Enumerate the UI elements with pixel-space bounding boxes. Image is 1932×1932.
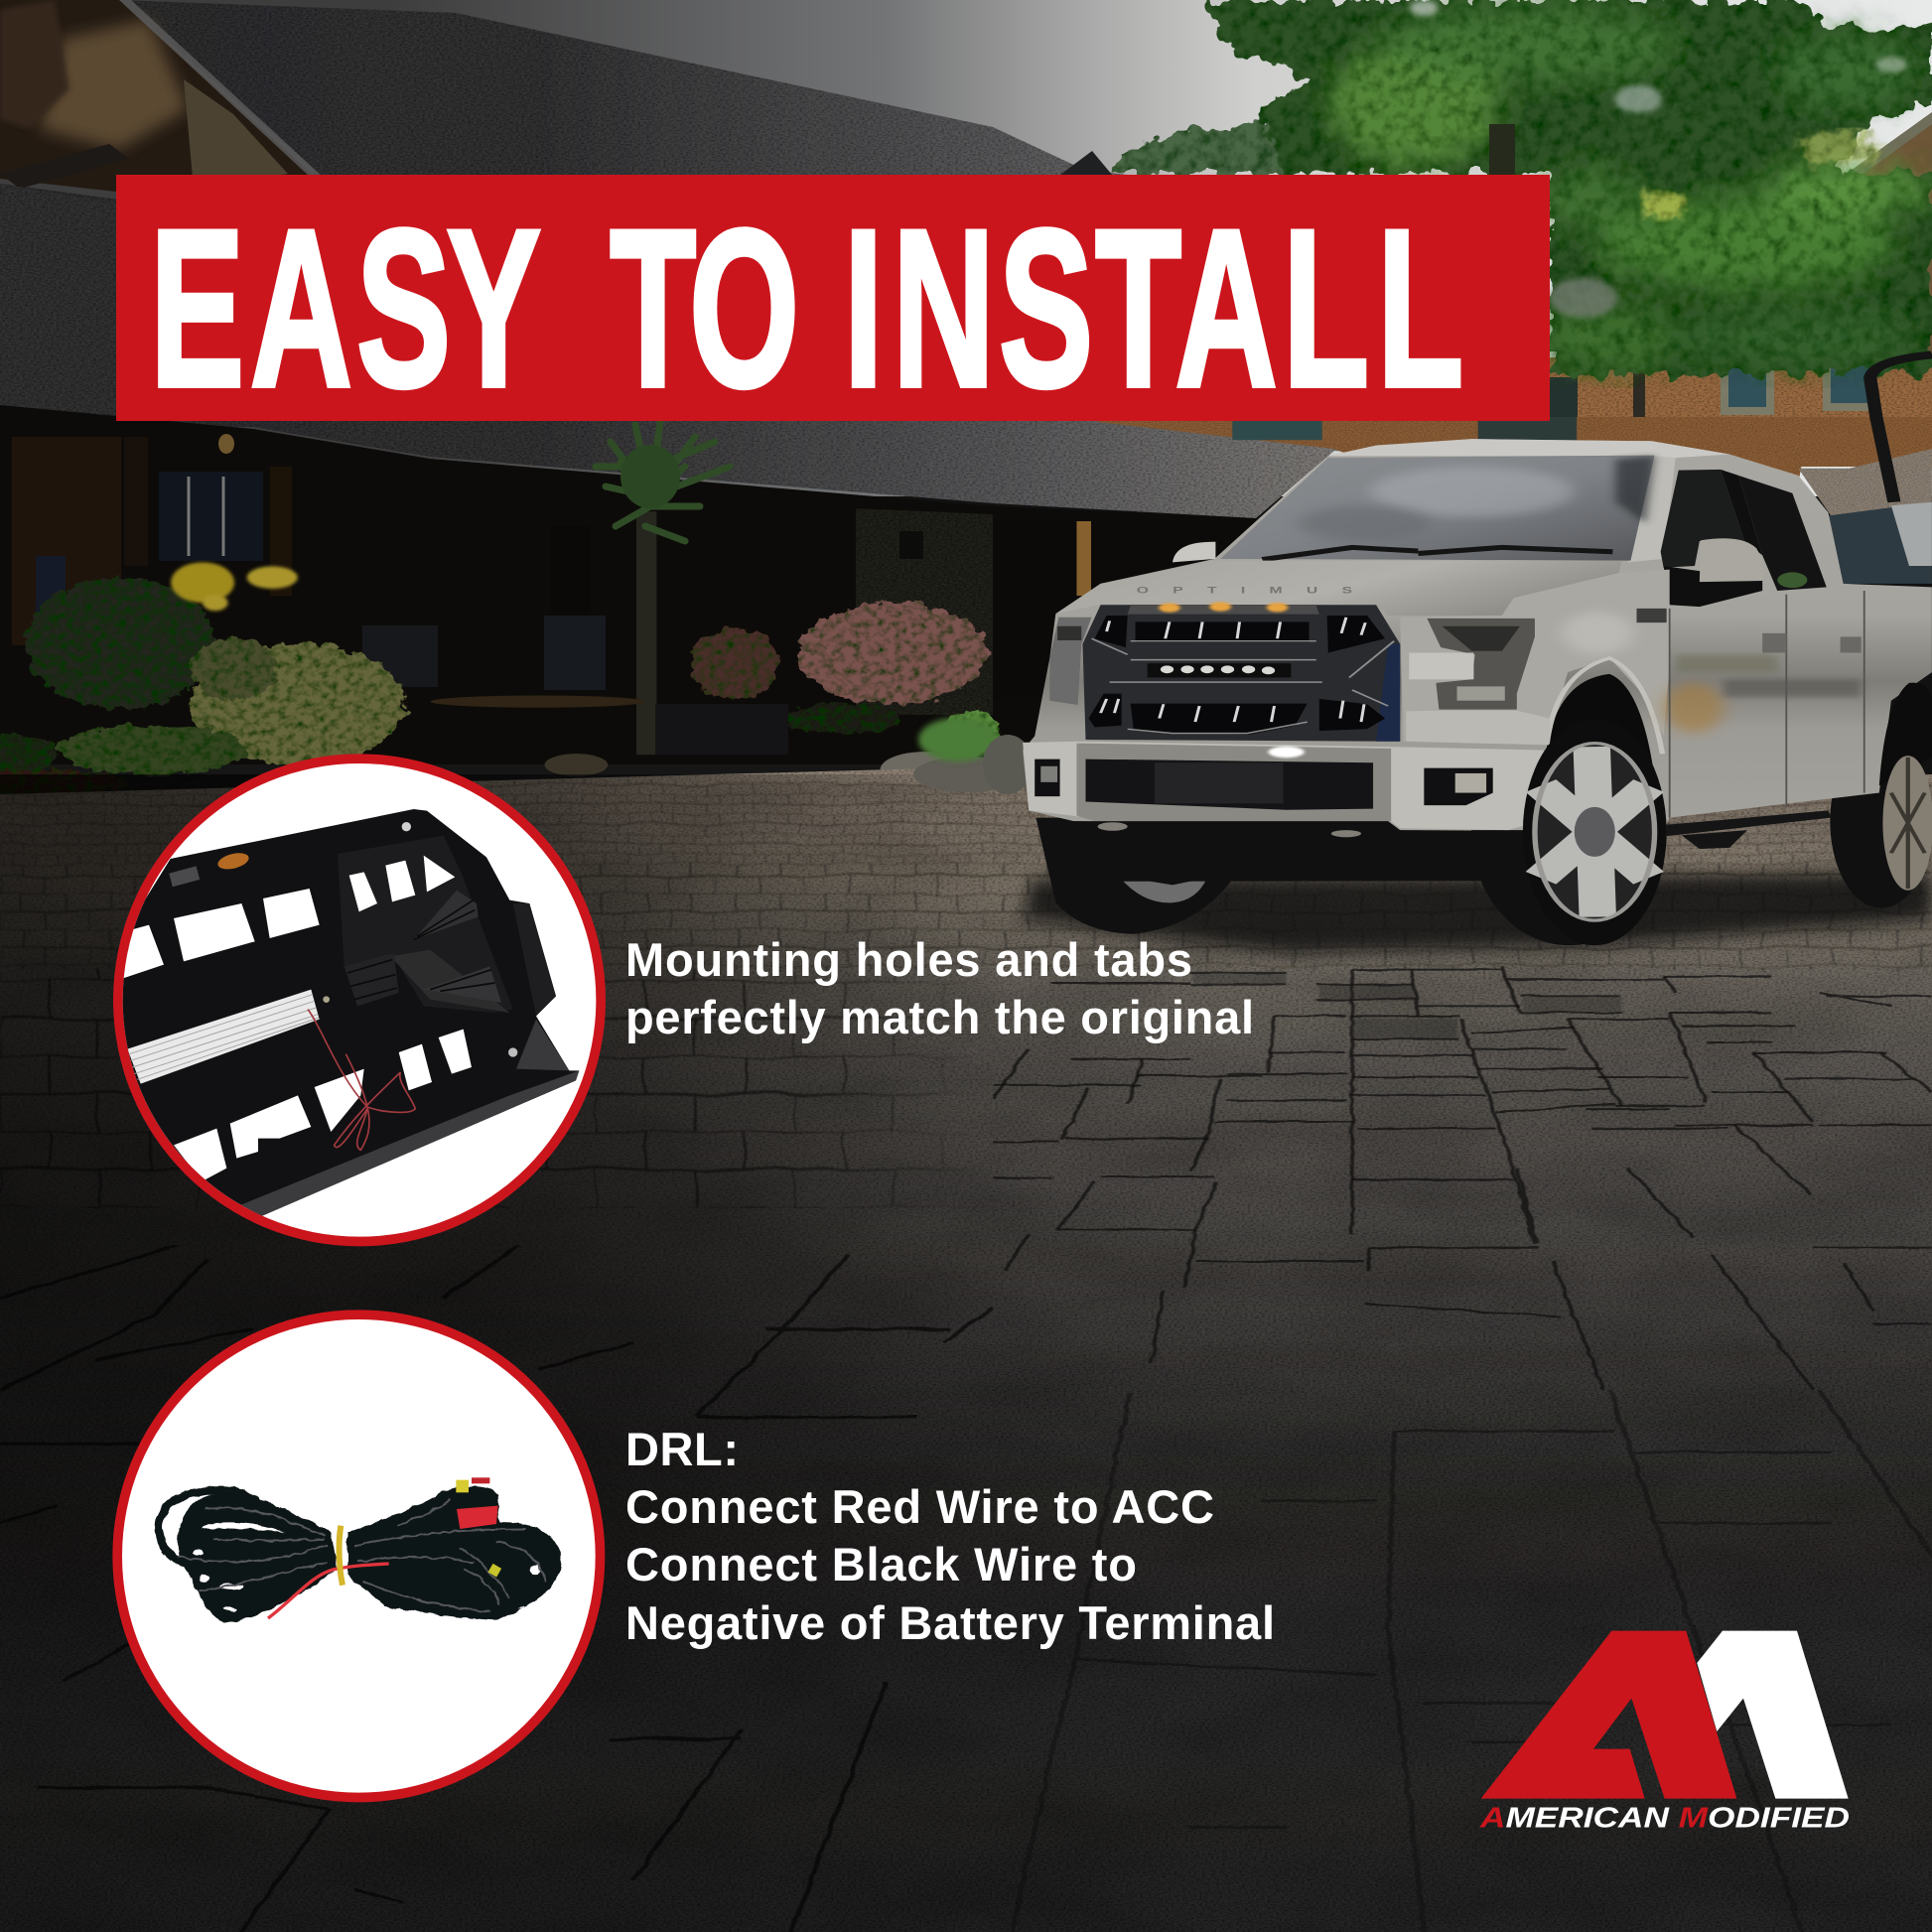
- white openings: [119, 856, 472, 1181]
- stone joints right: [993, 966, 1932, 1390]
- roof highlight: [1328, 439, 1729, 458]
- red connector: [457, 1506, 498, 1529]
- foliage highlights: [1330, 7, 1931, 369]
- sky gaps: [1410, 0, 1907, 318]
- stone wall: [856, 508, 993, 715]
- grille rim lines: [1092, 638, 1394, 734]
- headlight right: [1427, 619, 1535, 710]
- ring and white field: [113, 754, 606, 1246]
- rocks and grass by truck: [913, 718, 1033, 794]
- front right tire: [1471, 719, 1667, 945]
- feature text: DRL wiring: Connect Black Wire to: [625, 1538, 1137, 1590]
- feature circle: wiring harness: [112, 1310, 605, 1802]
- feature text: mounting: Mounting holes and tabs: [625, 933, 1192, 986]
- door recess: [551, 526, 591, 616]
- hood: [1055, 561, 1621, 616]
- pavement mottling: [0, 784, 1932, 1932]
- amber lens: [217, 853, 249, 870]
- wire highlights: [179, 1499, 544, 1611]
- lower roof: [116, 409, 1550, 518]
- bottom strip: [241, 1070, 579, 1216]
- ring and white field: [112, 1310, 605, 1802]
- logo mark: [1481, 1631, 1849, 1799]
- driveway edge: [0, 764, 1092, 794]
- stone joints lower right: [1011, 1390, 1932, 1932]
- yellow tie: [340, 1526, 343, 1586]
- wire bundle lobes: [178, 1486, 558, 1623]
- wipers: [1262, 547, 1612, 560]
- LED strip: [127, 990, 320, 1084]
- door reflections: [1664, 683, 1724, 733]
- A pillar: [1627, 456, 1676, 562]
- coiled wires: [159, 1490, 558, 1610]
- left wood panel: [12, 437, 121, 645]
- grille right edge blue: [1376, 644, 1400, 742]
- feature text: mounting: perfectly match the original: [625, 991, 1254, 1043]
- door seams and handles: [1670, 591, 1864, 818]
- left wheel arc: [1119, 876, 1207, 902]
- headline banner: [116, 175, 1550, 435]
- wall windows: [1550, 359, 1876, 447]
- boat windshield: [1824, 502, 1932, 584]
- connector: [169, 866, 200, 887]
- feature text: DRL wiring: Connect Red Wire to ACC: [625, 1480, 1214, 1533]
- grille top bar: [1128, 606, 1319, 615]
- front left tire: [1035, 818, 1234, 934]
- boat tower pipe: [1870, 355, 1932, 502]
- cobblestone driveway: [0, 766, 1932, 1932]
- left dark vignette: [0, 774, 1017, 1932]
- banner box: [116, 175, 1550, 421]
- cab and body: [1023, 439, 1932, 830]
- truck ground shadow: [1023, 874, 1932, 953]
- mirror right base: [1664, 566, 1762, 607]
- house gable right: [1844, 112, 1932, 377]
- rear arch: [1879, 683, 1932, 785]
- windshield: [1220, 456, 1655, 561]
- rear wheel: [1882, 756, 1932, 891]
- lower valance: [1043, 821, 1520, 882]
- lower body panel: [1406, 711, 1550, 745]
- red wire: [268, 1564, 389, 1618]
- porch post: [1075, 521, 1091, 596]
- bumper insert: [1086, 759, 1373, 810]
- sky: [0, 0, 1932, 496]
- house wall right: [1550, 357, 1932, 467]
- logo wordmark: AMERICAN MODIFIED: [1479, 1803, 1850, 1835]
- small brick joints: [0, 779, 1932, 1208]
- American Modified logo: [1479, 1631, 1850, 1835]
- palm fronds: [596, 422, 730, 541]
- red wires: [308, 1010, 415, 1150]
- hood lettering: OPTIMUS: [1137, 585, 1352, 596]
- bumper chrome: [1076, 744, 1391, 821]
- F-150 badge: [1636, 609, 1667, 622]
- feature text: mounting: [625, 933, 1254, 1043]
- grille rear view: [99, 809, 579, 1216]
- panels: [338, 836, 513, 1013]
- mirror left: [1173, 542, 1215, 562]
- truck left ground dark: [993, 520, 1076, 697]
- running board: [1667, 810, 1832, 836]
- stone joints lower left: [0, 1245, 993, 1932]
- chrome glint: [1268, 747, 1305, 758]
- wheel arch: [1547, 674, 1659, 818]
- headlight left: [1049, 618, 1092, 705]
- grille openings: [1089, 616, 1385, 735]
- bumper: [1023, 742, 1553, 830]
- front wheel: [1523, 719, 1667, 945]
- grille: [1082, 605, 1400, 742]
- darker paving stones: [1193, 971, 1621, 1038]
- feature text: DRL wiring: Negative of Battery Terminal: [625, 1596, 1275, 1649]
- window: [159, 472, 263, 561]
- tow hooks: [1098, 822, 1128, 831]
- pine foliage mass: [1206, 0, 1932, 375]
- gable tip: [1060, 151, 1112, 175]
- timber gable: [0, 0, 317, 199]
- pine tree: [1112, 0, 1932, 375]
- amber lights: [1159, 602, 1288, 613]
- headline text: EASY TO INSTALL: [150, 184, 1463, 435]
- tires behind body: [1035, 719, 1932, 945]
- fog light right: [1424, 768, 1493, 805]
- window pillar: [1721, 470, 1762, 555]
- rear tire: [1830, 735, 1932, 908]
- main roof: [0, 0, 1127, 427]
- wire bundle: [159, 1486, 558, 1623]
- side window rear: [1738, 476, 1827, 591]
- yellow-green highlights: [1640, 132, 1876, 219]
- mirror right: [1700, 538, 1763, 582]
- feature circle: grille: [99, 754, 606, 1246]
- pavement base: [0, 766, 1932, 1932]
- fog light left: [1035, 759, 1060, 796]
- pickup truck: [993, 355, 1932, 945]
- porch lamp: [218, 434, 234, 454]
- trunk: [1489, 124, 1515, 176]
- bushes: [0, 511, 1010, 795]
- grille fins: [1101, 618, 1365, 722]
- background roof right: [1798, 449, 1932, 516]
- ribs: [347, 900, 494, 1000]
- side window front: [1661, 470, 1744, 568]
- LED dots: [1161, 665, 1275, 674]
- wisps left of tree: [1112, 119, 1291, 175]
- brown house wall behind: [1089, 417, 1932, 498]
- yellow connector: [456, 1480, 469, 1492]
- house wall dark: [0, 405, 1256, 794]
- feature text: DRL wiring: DRL:: [625, 1423, 739, 1475]
- feature text: DRL wiring: [625, 1423, 1275, 1649]
- LED bar: [1148, 663, 1291, 677]
- white gaps in lobes: [193, 1522, 542, 1611]
- fender: [1400, 570, 1670, 745]
- mounting clips: [402, 822, 411, 831]
